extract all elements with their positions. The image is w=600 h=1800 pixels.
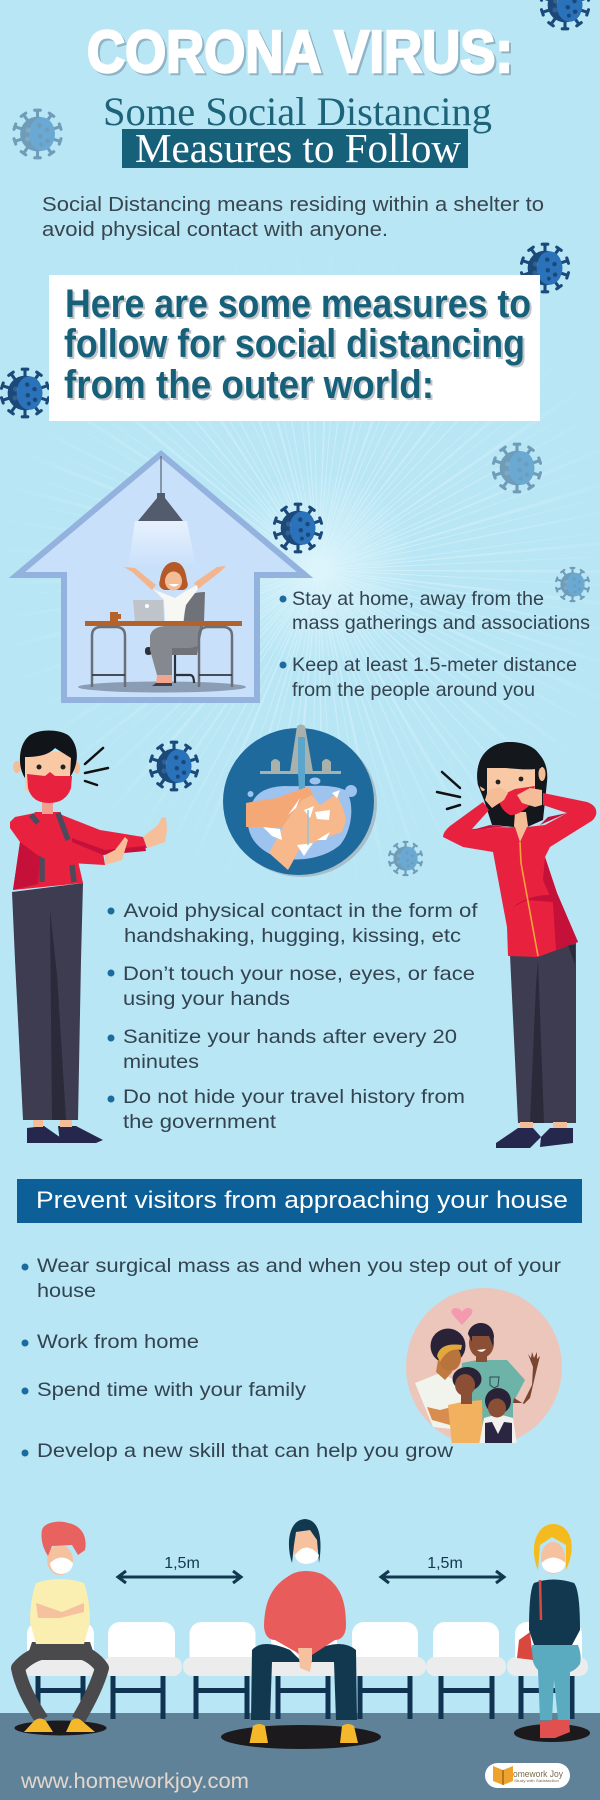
hand washing icon <box>223 724 377 877</box>
heading panel: from the outer world: <box>64 363 434 407</box>
contact bullets: Sanitize your hands after every 20 <box>123 1026 457 1048</box>
subtitle: Some Social Distancing <box>103 89 492 134</box>
subtitle banner: Measures to Follow <box>135 125 461 171</box>
intro paragraph: Social Distancing means residing within a shelter to <box>42 194 544 216</box>
contact bullets: using your hands <box>123 988 290 1010</box>
virus pale right <box>493 444 541 492</box>
stress marks <box>85 748 108 785</box>
stay at home bullets: mass gatherings and associations <box>292 612 590 634</box>
hand rear <box>143 817 167 848</box>
contact bullets: handshaking, hugging, kissing, etc <box>124 925 461 947</box>
hand right <box>269 793 346 870</box>
heading panel: follow for social distancing <box>66 324 527 368</box>
woman with mask <box>437 742 596 1148</box>
hair back <box>477 742 547 828</box>
virus top right <box>541 0 589 29</box>
hand front <box>105 837 128 865</box>
contact bullets: Do not hide your travel history from <box>123 1086 465 1108</box>
water <box>298 737 305 792</box>
laptop <box>133 600 164 621</box>
soap <box>263 790 340 856</box>
hands <box>485 787 542 808</box>
mask <box>498 786 535 815</box>
distance arrow left <box>118 1555 241 1583</box>
virus small pale <box>556 568 589 601</box>
home bullets: Spend time with your family <box>37 1379 306 1401</box>
stay at home bullets: from the people around you <box>292 679 535 701</box>
virus dark near house <box>274 504 322 552</box>
home bullets: Work from home <box>37 1331 199 1353</box>
mother <box>415 1328 484 1430</box>
contact bullets: minutes <box>123 1051 199 1073</box>
man with mask <box>10 730 167 1143</box>
virus left pale <box>14 110 61 158</box>
virus small pale center <box>389 842 422 875</box>
title: CORONA VIRUS: <box>89 21 515 87</box>
desk <box>85 621 242 687</box>
seated person right <box>514 1524 590 1742</box>
visitors banner: Prevent visitors from approaching your house <box>36 1187 568 1214</box>
logo: Study with Satisfaction <box>514 1779 559 1783</box>
heading panel: Here are some measures to <box>65 282 531 326</box>
intro paragraph: avoid physical contact with anyone. <box>42 219 388 241</box>
heading panel <box>49 275 540 421</box>
distance arrow left: 1,5m <box>164 1555 200 1572</box>
distance arrow right <box>381 1555 504 1583</box>
lamp <box>128 456 196 568</box>
arm <box>10 812 147 865</box>
faucet <box>260 724 341 774</box>
trousers <box>510 943 576 1123</box>
stay at home bullets: Keep at least 1.5-meter distance <box>292 654 577 676</box>
contact bullets <box>108 900 478 1133</box>
heart <box>452 1308 472 1325</box>
seated person left <box>14 1522 106 1736</box>
home bullets <box>22 1255 561 1462</box>
house illustration <box>17 454 305 700</box>
heading panel: Here are some measures to <box>67 284 533 328</box>
father <box>462 1323 540 1426</box>
visitors banner <box>17 1179 582 1223</box>
head <box>13 761 21 773</box>
chair seats <box>22 1657 588 1676</box>
neck <box>514 812 528 842</box>
contact bullets: Avoid physical contact in the form of <box>124 900 478 922</box>
contact bullets: Don’t touch your nose, eyes, or face <box>123 963 475 985</box>
shoes <box>496 1128 573 1148</box>
trousers <box>150 626 200 675</box>
virus dark by man <box>150 742 198 790</box>
stay at home bullets: Stay at home, away from the <box>292 588 544 610</box>
woman <box>124 562 226 686</box>
hand left <box>246 787 313 827</box>
stay at home bullets <box>280 588 590 701</box>
title: CORONA VIRUS: <box>87 19 513 85</box>
chair legs <box>38 1676 572 1719</box>
jacket <box>443 793 596 957</box>
heading panel: from the outer world: <box>66 365 436 409</box>
sunburst rays <box>153 405 483 735</box>
mug <box>110 612 121 621</box>
face <box>487 768 535 805</box>
child two <box>479 1388 517 1445</box>
trousers <box>12 883 83 1120</box>
virus right dark <box>521 244 569 292</box>
chair backs <box>27 1622 582 1667</box>
legs <box>18 1652 102 1720</box>
torso <box>13 812 83 890</box>
intro paragraph <box>42 194 544 241</box>
heading panel: follow for social distancing <box>64 322 525 366</box>
zip <box>520 842 538 956</box>
stress marks <box>437 772 460 809</box>
virus left dark <box>1 369 49 417</box>
chair <box>145 592 205 683</box>
website url: www.homeworkjoy.com <box>20 1769 249 1793</box>
neck <box>42 802 53 814</box>
seated person centre <box>221 1519 381 1749</box>
logo: omework Joy <box>513 1769 563 1780</box>
distance arrow right: 1,5m <box>427 1555 463 1572</box>
waiting room chairs <box>22 1622 588 1719</box>
child one <box>448 1367 483 1445</box>
home bullets: Wear surgical mass as and when you step out of your <box>37 1255 561 1277</box>
floor shadow <box>78 682 246 692</box>
shoes <box>27 1126 103 1143</box>
floor <box>0 1713 600 1800</box>
logo <box>485 1763 570 1788</box>
family illustration <box>406 1288 562 1446</box>
home bullets: Develop a new skill that can help you grow <box>37 1440 454 1462</box>
contact bullets: the government <box>123 1111 277 1133</box>
home bullets: house <box>37 1280 96 1302</box>
